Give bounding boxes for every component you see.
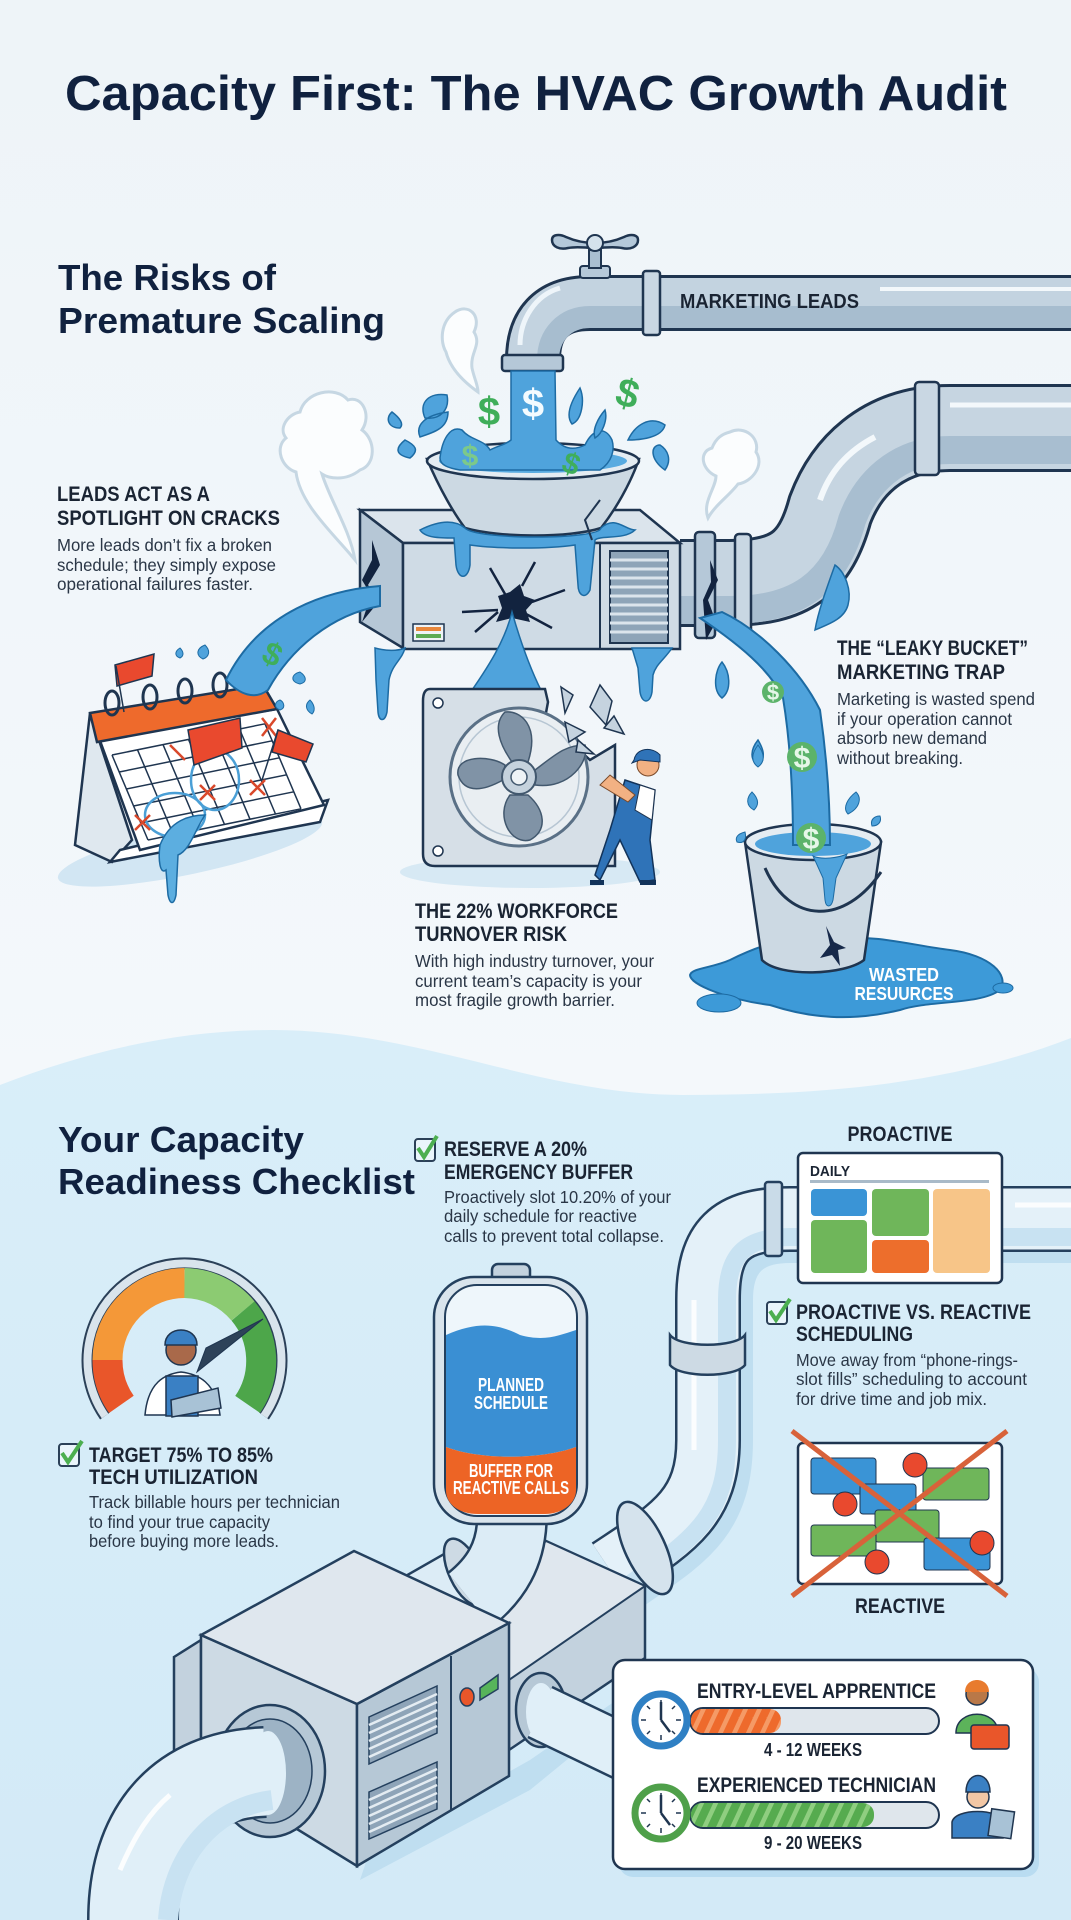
right large pipe <box>680 382 1071 640</box>
tank labels: PLANNED <box>478 1375 544 1395</box>
crack left <box>362 540 380 622</box>
heading: the risks of premature scaling: Premature Scaling <box>58 300 385 341</box>
tank: SCHEDULE <box>474 1393 548 1413</box>
tank: BUFFER FOR <box>469 1461 553 1481</box>
callout: leaky bucket: without breaking. <box>836 748 963 768</box>
callout: workforce turnover: most fragile growth barrier. <box>415 990 615 1010</box>
gauge with technician <box>88 1263 282 1417</box>
callout: reserve emergency buffer: calls to prevent total collapse. <box>444 1226 664 1246</box>
puddle label: WASTED <box>869 965 939 985</box>
heading: capacity readiness checklist: Your Capacity <box>58 1119 304 1160</box>
water stream with dollar signs and splashes <box>388 370 669 483</box>
heading: capacity readiness checklist <box>58 1119 415 1202</box>
title: Capacity First: The HVAC Growth Audit <box>65 67 1007 121</box>
callout: proactive vs reactive: PROACTIVE VS. REACTIVE <box>796 1301 1031 1324</box>
red cross <box>792 1431 1007 1596</box>
callout: leaky bucket: absorb new demand <box>837 728 987 748</box>
heading: the risks of premature scaling <box>58 257 385 341</box>
needle <box>197 1319 263 1372</box>
heading: capacity readiness checklist: Readiness Checklist <box>58 1161 415 1202</box>
callout: target utilization: before buying more leads. <box>89 1531 279 1551</box>
row: entry-level apprentice: ENTRY-LEVEL APPRENTICE <box>697 1680 936 1703</box>
pipe: marketing leads with faucet <box>502 235 1071 371</box>
right side pipe to card <box>516 1673 640 1760</box>
row: experienced technician <box>635 1774 1015 1853</box>
red flags <box>115 654 313 780</box>
leaky bucket <box>745 824 881 972</box>
callout: proactive vs reactive <box>767 1299 1031 1409</box>
panel: onboarding timelines <box>613 1660 1039 1877</box>
technician <box>590 749 660 885</box>
row: entry-level apprentice: 4 - 12 WEEKS <box>764 1740 862 1760</box>
callout: workforce turnover: With high industry turnover, your <box>415 951 654 971</box>
callout: leaky bucket <box>836 637 1035 768</box>
callout: reserve emergency buffer <box>415 1136 671 1246</box>
puddle label: RESUURCES <box>854 984 954 1004</box>
callout: leads act as a spotlight: SPOTLIGHT ON CRACKS <box>57 507 280 530</box>
pipe leak <box>815 565 849 630</box>
callout: proactive vs reactive: SCHEDULING <box>796 1323 913 1346</box>
lower section wave background <box>0 1030 1071 1920</box>
water arc into bucket: $ <box>794 742 811 775</box>
callout: leaky bucket: if your operation cannot <box>837 709 1012 729</box>
tank <box>434 1264 587 1524</box>
dollar symbols: $ <box>558 446 585 483</box>
technician icon <box>952 1776 1015 1839</box>
check icon <box>59 1441 82 1466</box>
hvac unit with cracks <box>360 510 680 649</box>
puddle <box>690 937 1003 1017</box>
callout: reserve emergency buffer: daily schedule for reactive <box>444 1206 637 1226</box>
check icon <box>415 1136 437 1161</box>
water arc from hvac to calendar <box>176 586 380 714</box>
card: reactive schedule: REACTIVE <box>855 1595 945 1618</box>
tank: REACTIVE CALLS <box>453 1478 569 1498</box>
water leaving calendar <box>159 815 205 902</box>
broken shards <box>561 685 624 754</box>
check icon <box>767 1299 790 1324</box>
card: proactive schedule: DAILY <box>810 1163 850 1180</box>
callout: leaky bucket: MARKETING TRAP <box>837 661 1005 684</box>
callout: workforce turnover: THE 22% WORKFORCE <box>415 900 618 923</box>
callout: leads act as a spotlight: More leads don’t fix a broken <box>57 535 272 555</box>
status lights <box>460 1675 498 1706</box>
main unit isometric box <box>174 1551 509 1866</box>
vent grille <box>610 551 668 643</box>
bottom left pipe <box>120 1705 325 1920</box>
callout: workforce turnover <box>415 900 654 1010</box>
pipe label: MARKETING LEADS <box>680 291 859 313</box>
vents <box>369 1686 437 1839</box>
small puddle drops <box>697 983 1013 1012</box>
water arc into bucket: $ <box>803 823 820 856</box>
callout: target utilization: Track billable hours per technician <box>89 1492 340 1512</box>
row: experienced technician: 9 - 20 WEEKS <box>764 1833 862 1853</box>
callout: workforce turnover: current team’s capacity is your <box>415 971 642 991</box>
broken fan unit with technician <box>400 685 660 888</box>
callout: target utilization: TARGET 75% TO 85% <box>89 1444 273 1467</box>
callout: proactive vs reactive: slot fills” scheduling to account <box>796 1369 1027 1389</box>
lower right pipe <box>610 1182 1071 1588</box>
crack center <box>462 562 565 632</box>
water arc into bucket <box>700 612 881 856</box>
dollar symbols: $ <box>611 370 644 418</box>
row: entry-level apprentice <box>635 1680 1009 1760</box>
callout: target utilization: to find your true capacity <box>89 1512 270 1532</box>
rear box and connecting pipes <box>360 1494 684 1880</box>
callout: leads act as a spotlight: operational failures faster. <box>57 574 253 594</box>
water arc from hvac to calendar: $ <box>257 634 288 674</box>
card: proactive schedule <box>798 1123 1002 1283</box>
callout: proactive vs reactive: for drive time and job mix. <box>796 1389 987 1409</box>
callout: leaky bucket: THE “LEAKY BUCKET” <box>837 637 1028 660</box>
heading: the risks of premature scaling: The Risks of <box>58 257 277 298</box>
puddle label <box>854 965 954 1004</box>
dollar symbols <box>462 370 644 483</box>
callout: proactive vs reactive: Move away from “phone-rings- <box>796 1350 1018 1370</box>
callout: leads act as a spotlight: LEADS ACT AS A <box>57 483 210 506</box>
callout: reserve emergency buffer: RESERVE A 20% <box>444 1138 587 1161</box>
technician <box>145 1330 221 1417</box>
dollar symbols: $ <box>478 390 500 434</box>
callout: workforce turnover: TURNOVER RISK <box>415 923 567 946</box>
callout: reserve emergency buffer: Proactively slot 10.20% of your <box>444 1187 671 1207</box>
water arc into bucket: $ <box>767 680 779 705</box>
card: reactive schedule <box>792 1431 1007 1618</box>
row: experienced technician: EXPERIENCED TECHNICIAN <box>697 1774 936 1797</box>
callout: target utilization: TECH UTILIZATION <box>89 1466 258 1489</box>
calendar leaking water <box>53 654 328 902</box>
drips below hvac <box>375 612 763 765</box>
callout: reserve emergency buffer: EMERGENCY BUFFER <box>444 1161 633 1184</box>
callout: leads act as a spotlight <box>57 483 280 594</box>
callout: leaky bucket: Marketing is wasted spend <box>837 689 1035 709</box>
callout: leads act as a spotlight: schedule; they simply expose <box>57 555 276 575</box>
dollar symbols: $ <box>522 382 544 426</box>
steam clouds <box>280 309 759 560</box>
dollar symbols: $ <box>462 440 479 473</box>
apprentice icon <box>956 1680 1009 1749</box>
callout: target utilization <box>59 1441 340 1551</box>
indicator lights <box>413 624 444 641</box>
card: proactive schedule: PROACTIVE <box>848 1123 952 1146</box>
fan blades <box>450 708 588 846</box>
bowl with spilling water <box>420 443 639 595</box>
